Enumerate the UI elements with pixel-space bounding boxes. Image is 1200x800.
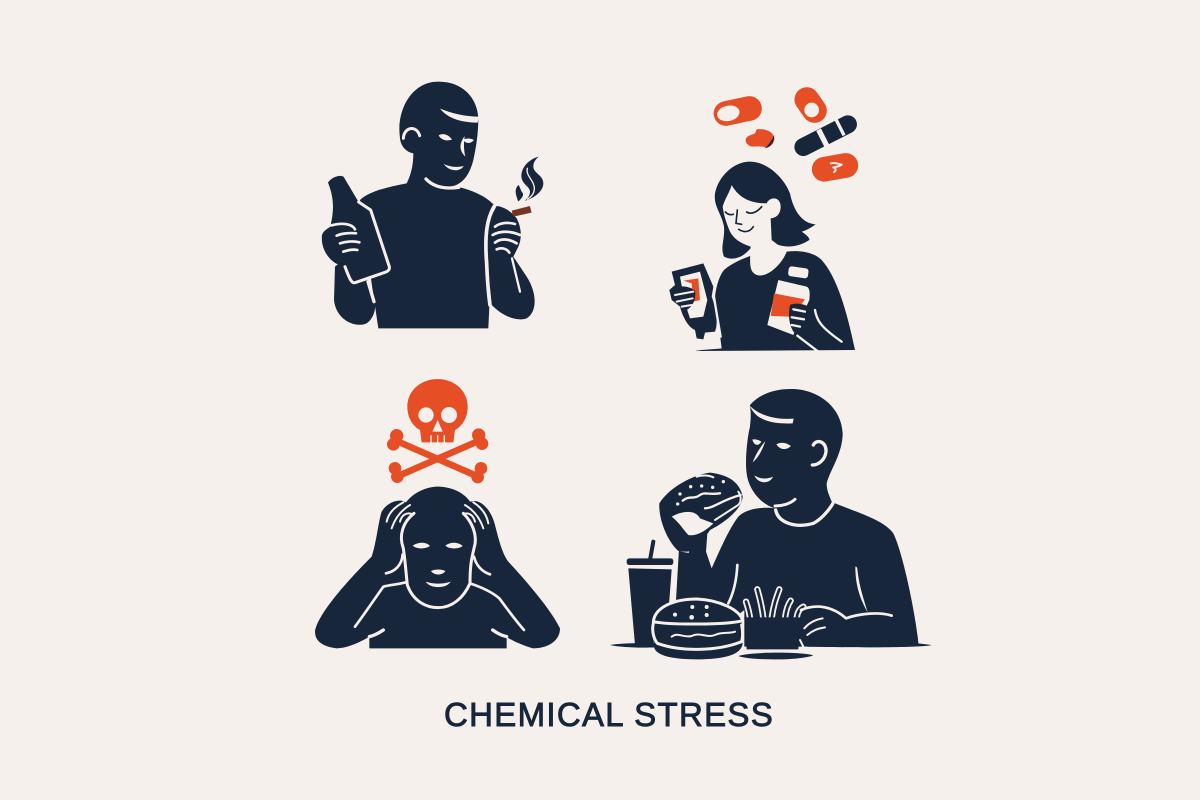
figure: woman with medicine and pills (669, 82, 860, 352)
man body and head (360, 82, 494, 328)
smoke (516, 157, 543, 202)
woman hair (715, 162, 816, 259)
woman torso (695, 251, 855, 351)
tube and left hand (669, 263, 721, 339)
right hand on table (800, 607, 892, 647)
fries in container (738, 589, 813, 659)
man face and arm outlines (355, 502, 524, 637)
woman face and neck (723, 185, 787, 276)
figure: man holding head under skull and crossbones (315, 379, 560, 648)
left arm with bottle (322, 176, 390, 325)
right arm with cigarette (486, 206, 535, 319)
cup with straw (610, 542, 673, 648)
figure: man with bottle and cigarette (322, 82, 543, 328)
figure: man eating fast food (610, 389, 932, 659)
medicine bottle and hand (767, 266, 842, 352)
man silhouette (315, 487, 560, 648)
pills (711, 82, 860, 184)
man silhouette (672, 389, 932, 647)
burger on table (653, 599, 743, 659)
cigarette (512, 205, 533, 217)
title: CHEMICAL STRESS (444, 696, 774, 733)
icon: skull and crossbones (387, 379, 488, 483)
hand holding burger (659, 473, 743, 552)
